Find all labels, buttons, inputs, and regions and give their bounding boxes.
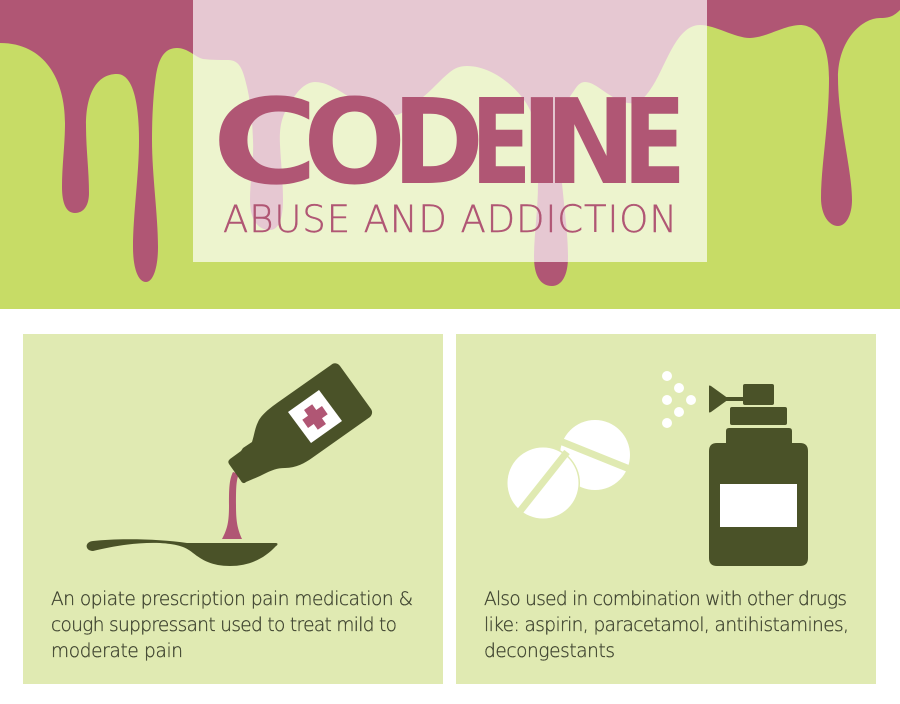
spoon: [87, 539, 278, 566]
description text: moderate pain: [51, 641, 183, 662]
cross: [298, 400, 332, 434]
description text: [51, 589, 413, 662]
panel: opiate medication: [23, 334, 443, 684]
bottle body: [228, 363, 372, 483]
subtitle: ABUSE AND ADDICTION: [223, 198, 677, 241]
translucent title panel: [193, 0, 707, 262]
header background with drips: [0, 0, 900, 309]
pill front: [506, 446, 580, 520]
title: D: [392, 73, 484, 211]
pill back: [560, 420, 632, 490]
title: E: [623, 73, 686, 211]
title: [212, 73, 686, 211]
description text: An opiate prescription pain medication &: [51, 589, 413, 610]
title: N: [545, 73, 636, 211]
spray dots: [662, 371, 696, 428]
description text: [484, 589, 849, 662]
description text: decongestants: [484, 641, 615, 662]
bottle label: [720, 484, 797, 527]
description text: like: aspirin, paracetamol, antihistamines,: [484, 615, 849, 636]
title: C: [212, 73, 319, 211]
title: I: [520, 73, 564, 211]
icon: medicine bottle pouring onto spoon: [86, 363, 372, 566]
poured syrup: [222, 472, 242, 539]
description text: cough suppressant used to treat mild to: [51, 615, 397, 636]
bottle label: [288, 390, 342, 443]
panel: combination drugs: [456, 334, 876, 684]
icon: pills and spray bottle: [508, 371, 808, 566]
spray bottle: [709, 384, 808, 566]
title: O: [303, 73, 406, 211]
title: E: [471, 73, 531, 211]
description text: Also used in combination with other drugs: [484, 589, 847, 610]
